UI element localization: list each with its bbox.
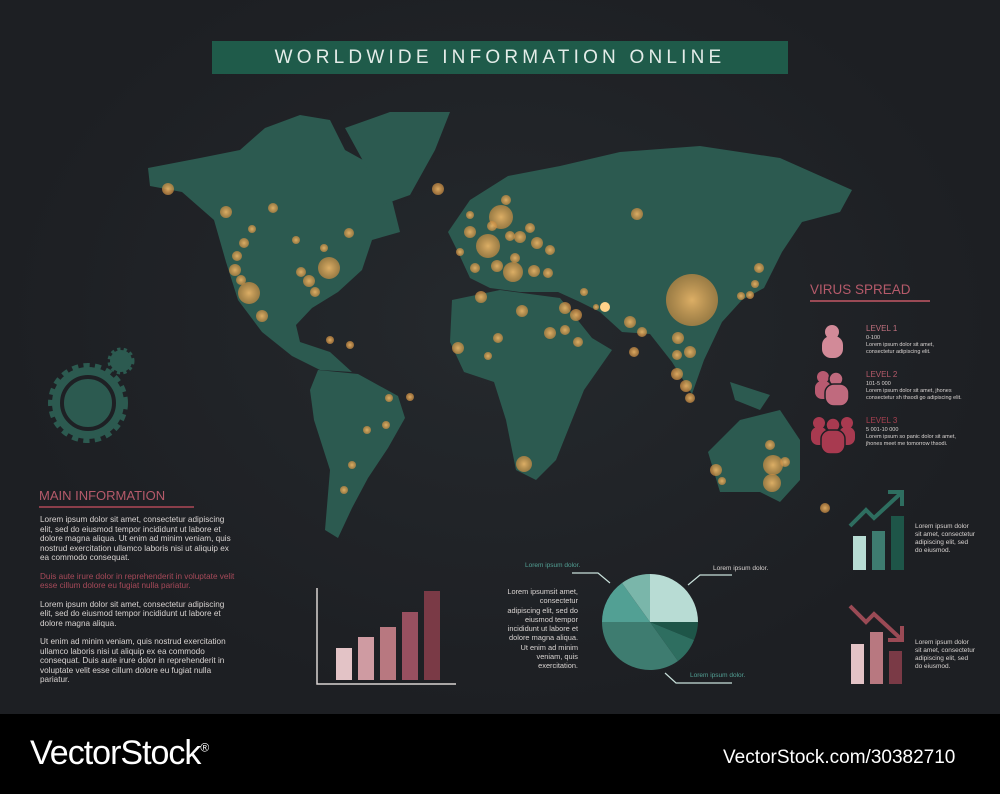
chart: falling (848, 604, 904, 684)
pie chart (525, 562, 768, 684)
text block: Lorem ipsum dolor sit amet, consectetur adipiscing elit, sed do eiusmod tempor incididunt ut labore et dolore magna aliqua. Ut enim ad minim veniam, quis nostrud exercitation ullamco laboris nisi ut aliquip ex ea commodo consequat. (40, 515, 231, 562)
continent: greenland (345, 112, 450, 205)
continent: australia (708, 410, 800, 502)
level 2: Lorem ipsum dolor sit amet, jhones (866, 388, 952, 394)
level 3: Lorem ipsum so panic dolor sit amet, (866, 434, 956, 440)
level 1: consectetur adipiscing elit. (866, 349, 931, 355)
level 1: LEVEL 1 (866, 324, 897, 333)
bar chart: pink bars (316, 588, 456, 685)
title (212, 41, 788, 74)
chart: rising (848, 490, 904, 570)
level 1: Lorem ipsum dolor sit amet, (866, 342, 934, 348)
panel: virus spread (810, 282, 962, 454)
virus dots (162, 183, 830, 513)
level 2: consectetur sh thsodi go adipiscing elit. (866, 395, 962, 401)
level 3: LEVEL 3 (866, 416, 897, 425)
icon: gears (48, 348, 134, 443)
pie chart: Lorem ipsum dolor. (713, 565, 768, 572)
heading: virus spread: VIRUS SPREAD (810, 282, 911, 297)
level 1 (822, 324, 934, 358)
level 1: 0-100 (866, 335, 880, 341)
footer url: VectorStock.com/30382710 (723, 747, 955, 768)
pie text block: Lorem ipsumsit amet, consectetur adipiscing elit, sed do eiusmod tempor incididunt ut labore et dolore magna aliqua. Ut enim ad minim veniam, quis exercitation. (507, 587, 578, 670)
continent: north america (148, 115, 400, 372)
text: rising: Lorem ipsum dolor sit amet, consectetur adipiscing elit, sed do eiusmod. (915, 523, 975, 554)
text: falling: Lorem ipsum dolor sit amet, consectetur adipiscing elit, sed do eiusmod. (915, 639, 975, 670)
level 3 (811, 416, 956, 454)
text block: Duis aute irure dolor in reprehenderit in voluptate velit esse cillum dolore eu fugiat nulla pariatur. (40, 572, 234, 590)
continent: eurasia (448, 146, 852, 394)
level 2 (815, 370, 962, 406)
panel: main information (39, 488, 234, 684)
footer (0, 714, 1000, 794)
title: WORLDWIDE INFORMATION ONLINE (275, 47, 725, 68)
text block (40, 515, 234, 684)
heading: virus spread (810, 282, 930, 302)
level 3: jhones meet me tomorrow thsodi. (866, 441, 947, 447)
heading: MAIN INFORMATION (39, 488, 165, 503)
level 2: LEVEL 2 (866, 370, 897, 379)
level 3: 5 001-10 000 (866, 427, 898, 433)
text block: Lorem ipsum dolor sit amet, consectetur adipiscing elit, sed do eiusmod tempor incididunt ut labore et dolore magna aliqua. (40, 600, 224, 628)
pie chart: Lorem ipsum dolor. (525, 562, 580, 569)
heading (39, 488, 194, 508)
level 2: 101-5 000 (866, 381, 891, 387)
footer logo: VectorStock® (30, 734, 208, 772)
pie chart: Lorem ipsum dolor. (690, 672, 745, 679)
continent: africa (450, 290, 612, 480)
text block: Ut enim ad minim veniam, quis nostrud exercitation ullamco laboris nisi ut aliquip ex ea commodo consequat. Duis aute irure dolor in reprehenderit in voluptate velit esse cillum dolore eu fugiat nulla pariatur. (40, 637, 226, 684)
continent: south america (310, 370, 405, 538)
